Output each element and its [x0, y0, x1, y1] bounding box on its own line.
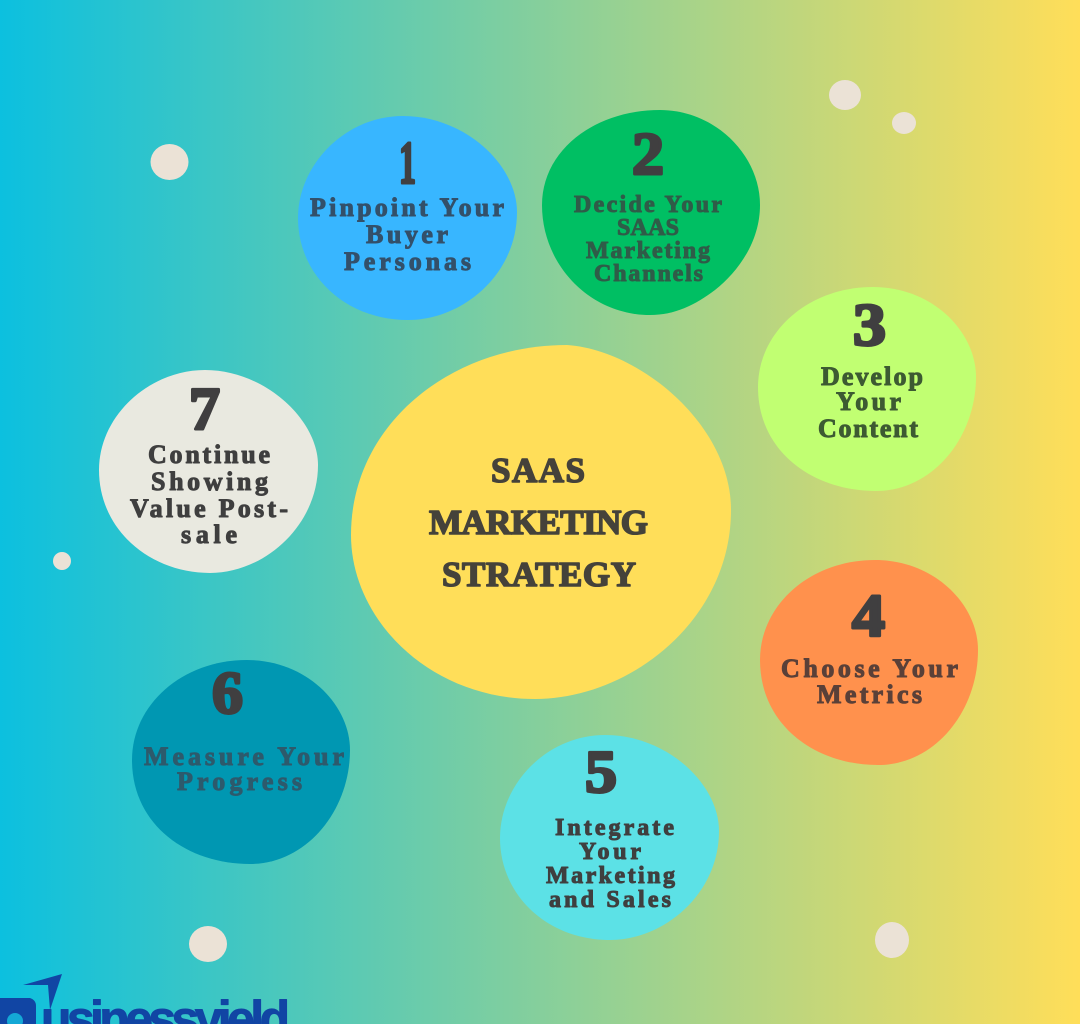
number 3: 3	[853, 292, 886, 358]
step 5 label: Marketing	[546, 863, 675, 889]
step 2 label: Decide Your	[574, 192, 722, 218]
center panel: SAAS Marketing Strategy	[351, 345, 731, 699]
step 4 label	[781, 654, 958, 709]
step 4 label: Metrics	[817, 680, 922, 709]
step 3 label: Your	[836, 387, 901, 416]
number 6: 6	[212, 660, 243, 726]
step 6 label: Measure Your	[144, 742, 344, 771]
step 2 label: SAAS	[617, 215, 679, 241]
step 7 label: Continue	[148, 440, 270, 469]
number 4: 4	[852, 583, 885, 649]
step 5 label: Your	[579, 839, 641, 865]
number 5: 5	[585, 739, 617, 805]
step 5 label: and Sales	[549, 887, 671, 913]
step 7 label	[130, 440, 288, 549]
step 1 label	[310, 193, 504, 276]
number 1: 1	[399, 130, 416, 196]
step 6 label	[144, 742, 344, 796]
step 3 label	[818, 362, 923, 443]
step 4: Choose Your Metrics	[760, 560, 978, 765]
step 1 label: Buyer	[366, 220, 448, 249]
step 4 label: Choose Your	[781, 654, 958, 683]
step 1 label: Personas	[344, 247, 471, 276]
step 5 label: Integrate	[555, 815, 674, 841]
step 1: Pinpoint Your Buyer Personas	[298, 116, 517, 320]
step 3 label: Content	[818, 414, 918, 443]
decorative dot: bottom left	[189, 926, 227, 962]
center title: SAAS	[491, 451, 585, 490]
logo B	[0, 998, 36, 1024]
number 7: 7	[189, 376, 220, 442]
decorative dot: upper left	[150, 144, 188, 180]
logo arrow	[23, 974, 62, 1010]
step 2: Decide Your SAAS Marketing Channels	[542, 110, 760, 315]
step 7 label: Value Post-	[130, 494, 288, 523]
decorative dot: left	[53, 552, 71, 570]
step 3 label: Develop	[821, 362, 923, 391]
decorative dot: upper right small	[892, 112, 916, 134]
step 7 label: sale	[181, 520, 237, 549]
step 5 label	[546, 815, 675, 913]
step 7 label: Showing	[151, 467, 268, 496]
center title: STRATEGY	[442, 555, 636, 594]
step 3: Develop Your Content	[758, 287, 976, 491]
step 5: Integrate Your Marketing and Sales	[500, 735, 719, 940]
number 2: 2	[632, 121, 664, 187]
step 1 label: Pinpoint Your	[310, 193, 504, 222]
step 6 label: Progress	[177, 767, 302, 796]
logo: Businessyield	[0, 974, 290, 1024]
decorative dot: upper right large	[829, 80, 861, 110]
step 2 label	[574, 192, 722, 287]
center title: MARKETING	[429, 503, 648, 542]
center title	[429, 451, 648, 594]
step 2 label: Marketing	[586, 238, 710, 264]
step 7: Continue Showing Value Post-sale	[99, 370, 318, 573]
step 2 label: Channels	[594, 261, 703, 287]
step 6: Measure Your Progress	[132, 660, 350, 864]
decorative dot: bottom right	[875, 922, 909, 958]
